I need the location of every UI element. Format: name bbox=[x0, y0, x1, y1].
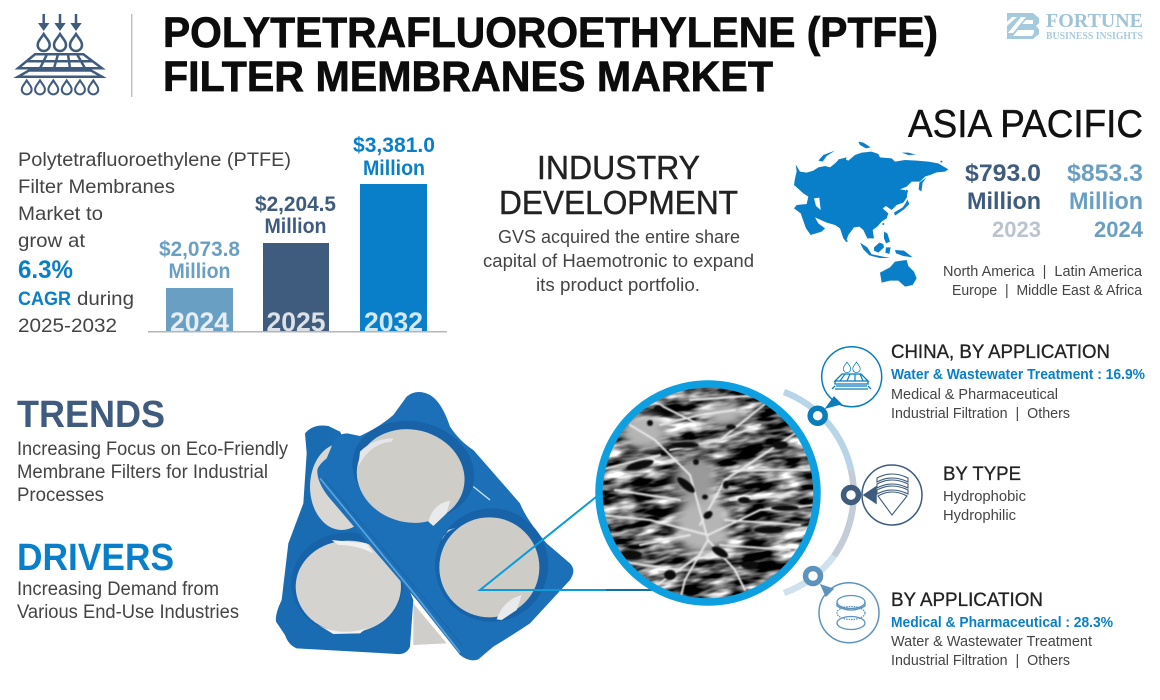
drivers bbox=[17, 537, 239, 623]
heading: Asia Pacific: ASIA PACIFIC bbox=[908, 103, 1143, 146]
magnified membrane image bbox=[595, 380, 821, 606]
map: Asia Pacific bbox=[794, 142, 948, 287]
trends: Increasing Focus on Eco-Friendly bbox=[17, 439, 288, 460]
trends: Processes bbox=[17, 485, 104, 506]
segment: China by application: Medical & Pharmaceutical bbox=[891, 387, 1058, 403]
logo: Fortune Business Insights bbox=[1007, 11, 1143, 42]
bar chart: market size bbox=[148, 134, 447, 337]
text: industry development body: GVS acquired the entire share bbox=[498, 227, 740, 247]
bar: 2032: Million bbox=[363, 157, 425, 180]
bar: 2032: 2032 bbox=[364, 307, 423, 337]
text: industry development body: capital of Haemotronic to expand bbox=[483, 251, 754, 271]
marker: top bbox=[810, 408, 825, 423]
icon: by type circle bbox=[862, 465, 922, 525]
text: CAGR summary: 2025-2032 bbox=[18, 315, 117, 337]
bar: 2024 bbox=[159, 238, 240, 337]
callout lines bbox=[480, 497, 653, 590]
segment: by type: Hydrophobic bbox=[943, 489, 1026, 505]
bar: 2025: $2,204.5 bbox=[255, 193, 336, 216]
text: industry development body: its product portfolio. bbox=[536, 275, 700, 295]
heading: industry development: INDUSTRY bbox=[537, 149, 700, 186]
title: FILTER MEMBRANES MARKET bbox=[163, 53, 773, 101]
text: other regions: North America | Latin America bbox=[943, 264, 1143, 280]
bar: 2024: $2,073.8 bbox=[159, 238, 240, 261]
trends bbox=[17, 394, 288, 506]
stats: Asia Pacific values bbox=[965, 160, 1144, 242]
bar: 2032 bbox=[353, 134, 435, 337]
segment: by application bbox=[891, 590, 1113, 669]
stat: 2024: Million bbox=[1069, 188, 1143, 215]
segment: by type: Hydrophilic bbox=[943, 508, 1016, 524]
arc connector bbox=[784, 392, 854, 593]
heading: industry development bbox=[499, 149, 738, 221]
text: other regions: Europe | Middle East & Africa bbox=[952, 283, 1143, 299]
stat: 2023: Million bbox=[967, 188, 1041, 215]
segment: by application: Water & Wastewater Treatment bbox=[891, 634, 1092, 650]
drivers: Various End-Use Industries bbox=[17, 602, 239, 623]
drivers: Increasing Demand from bbox=[17, 579, 219, 600]
segment: China by application: Water & Wastewater Treatment : 16.9% bbox=[891, 367, 1145, 383]
text: other regions bbox=[943, 264, 1143, 299]
stat: 2024: $853.3 bbox=[1067, 160, 1143, 187]
text: CAGR summary: Filter Membranes bbox=[18, 176, 175, 198]
marker: middle bbox=[844, 488, 858, 502]
stat: 2024: 2024 bbox=[1094, 217, 1144, 242]
stat: 2023: 2023 bbox=[992, 217, 1041, 242]
segment: by application: Medical & Pharmaceutical : 28.3% bbox=[891, 615, 1113, 631]
bar: 2024: Million bbox=[168, 260, 230, 283]
segment: by type bbox=[943, 464, 1026, 524]
bar: 2025: 2025 bbox=[266, 307, 326, 337]
segment: China by application: Industrial Filtration | Others bbox=[891, 406, 1070, 422]
text: CAGR summary bbox=[18, 149, 291, 337]
text: CAGR summary: during bbox=[77, 288, 134, 310]
bar: 2032: $3,381.0 bbox=[353, 134, 435, 157]
bar: 2025 bbox=[255, 193, 336, 337]
segment: China by application bbox=[891, 342, 1145, 422]
product photo: membrane filter trays bbox=[276, 392, 573, 660]
logo: Fortune Business Insights: BUSINESS INSIGHTS bbox=[1046, 31, 1143, 42]
logo: Fortune Business Insights: FORTUNE bbox=[1046, 11, 1143, 32]
bar: 2025: Million bbox=[264, 215, 326, 238]
text: CAGR summary: 6.3% bbox=[18, 256, 73, 284]
icon: water treatment circle bbox=[822, 347, 882, 408]
marker: bottom bbox=[806, 568, 820, 584]
text: CAGR summary: CAGR bbox=[18, 288, 71, 310]
title: POLYTETRAFLUOROETHYLENE (PTFE) bbox=[163, 9, 938, 57]
icon: filter membrane header bbox=[18, 14, 102, 94]
drivers: DRIVERS bbox=[17, 537, 174, 579]
heading: industry development: DEVELOPMENT bbox=[499, 184, 738, 221]
text: CAGR summary: Market to bbox=[18, 203, 103, 225]
segment: by application: BY APPLICATION bbox=[891, 590, 1043, 611]
stat: 2023 bbox=[965, 160, 1041, 242]
stat: 2024 bbox=[1067, 160, 1144, 242]
segment: China by application: CHINA, BY APPLICATION bbox=[891, 342, 1110, 363]
segment: by application: Industrial Filtration | Others bbox=[891, 653, 1070, 669]
stat: 2023: $793.0 bbox=[965, 160, 1041, 187]
text: CAGR summary: Polytetrafluoroethylene (PTFE) bbox=[18, 149, 291, 171]
title bbox=[163, 9, 938, 101]
text: industry development body bbox=[483, 227, 754, 295]
trends: TRENDS bbox=[17, 394, 165, 436]
icon: by application circle bbox=[819, 583, 879, 643]
text: CAGR summary: grow at bbox=[18, 230, 86, 252]
segment: by type: BY TYPE bbox=[943, 464, 1021, 485]
trends: Membrane Filters for Industrial bbox=[17, 462, 268, 483]
bar: 2024: 2024 bbox=[170, 307, 229, 337]
